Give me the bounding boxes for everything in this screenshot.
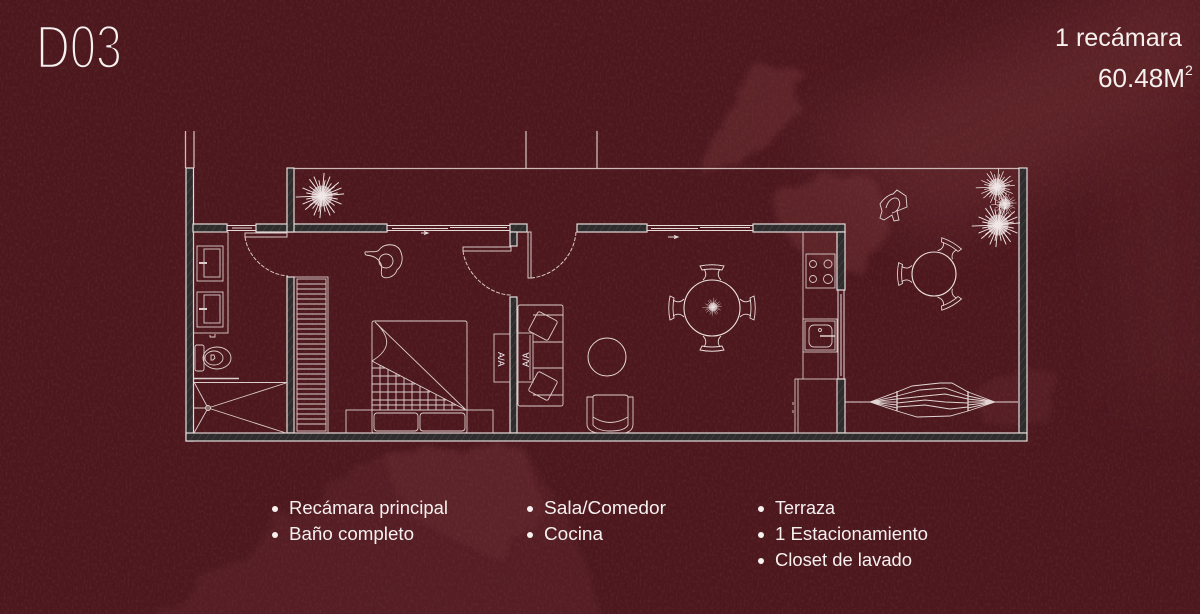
doors [245,232,576,295]
sofa [518,305,563,406]
amenities column 1 [272,497,448,544]
air conditioners: A/A [496,352,506,367]
coffee table [588,338,626,376]
bathroom fixtures [194,232,287,433]
armchair [587,395,633,433]
plants: terrace corner [972,168,1020,247]
header: bedrooms and area: 1 recámara [1055,24,1182,52]
amenities column 3 [758,497,928,570]
amenities column 1: Baño completo [289,523,414,544]
title: unit code: D03 [36,13,122,81]
hammock [845,383,1018,417]
person [365,245,402,278]
windows [227,226,844,379]
amenities column 3: Terraza [775,497,836,518]
bed [346,321,493,433]
air conditioners: A/A [521,352,531,367]
air conditioners [494,333,533,382]
kitchen [793,232,837,433]
amenities column 2: Sala/Comedor [544,497,666,518]
header: bedrooms and area [1055,24,1193,93]
walls [186,168,1027,441]
amenities column 1: Recámara principal [289,497,448,518]
terrace table with chairs [898,237,962,311]
closet [294,277,328,433]
person: terrace [880,190,907,221]
amenities column 3: 1 Estacionamiento [775,523,928,544]
amenities column 2: Cocina [544,523,604,544]
header: bedrooms and area: 60.48M [1098,63,1185,93]
amenities column 2 [527,497,666,544]
plant: bedroom terrace [296,173,344,218]
exterior stub lines [186,131,1027,168]
floor plan [186,131,1027,441]
amenities column 3: Closet de lavado [775,549,912,570]
header: bedrooms and area: 2 [1185,62,1193,78]
dining table with chairs [669,265,755,351]
